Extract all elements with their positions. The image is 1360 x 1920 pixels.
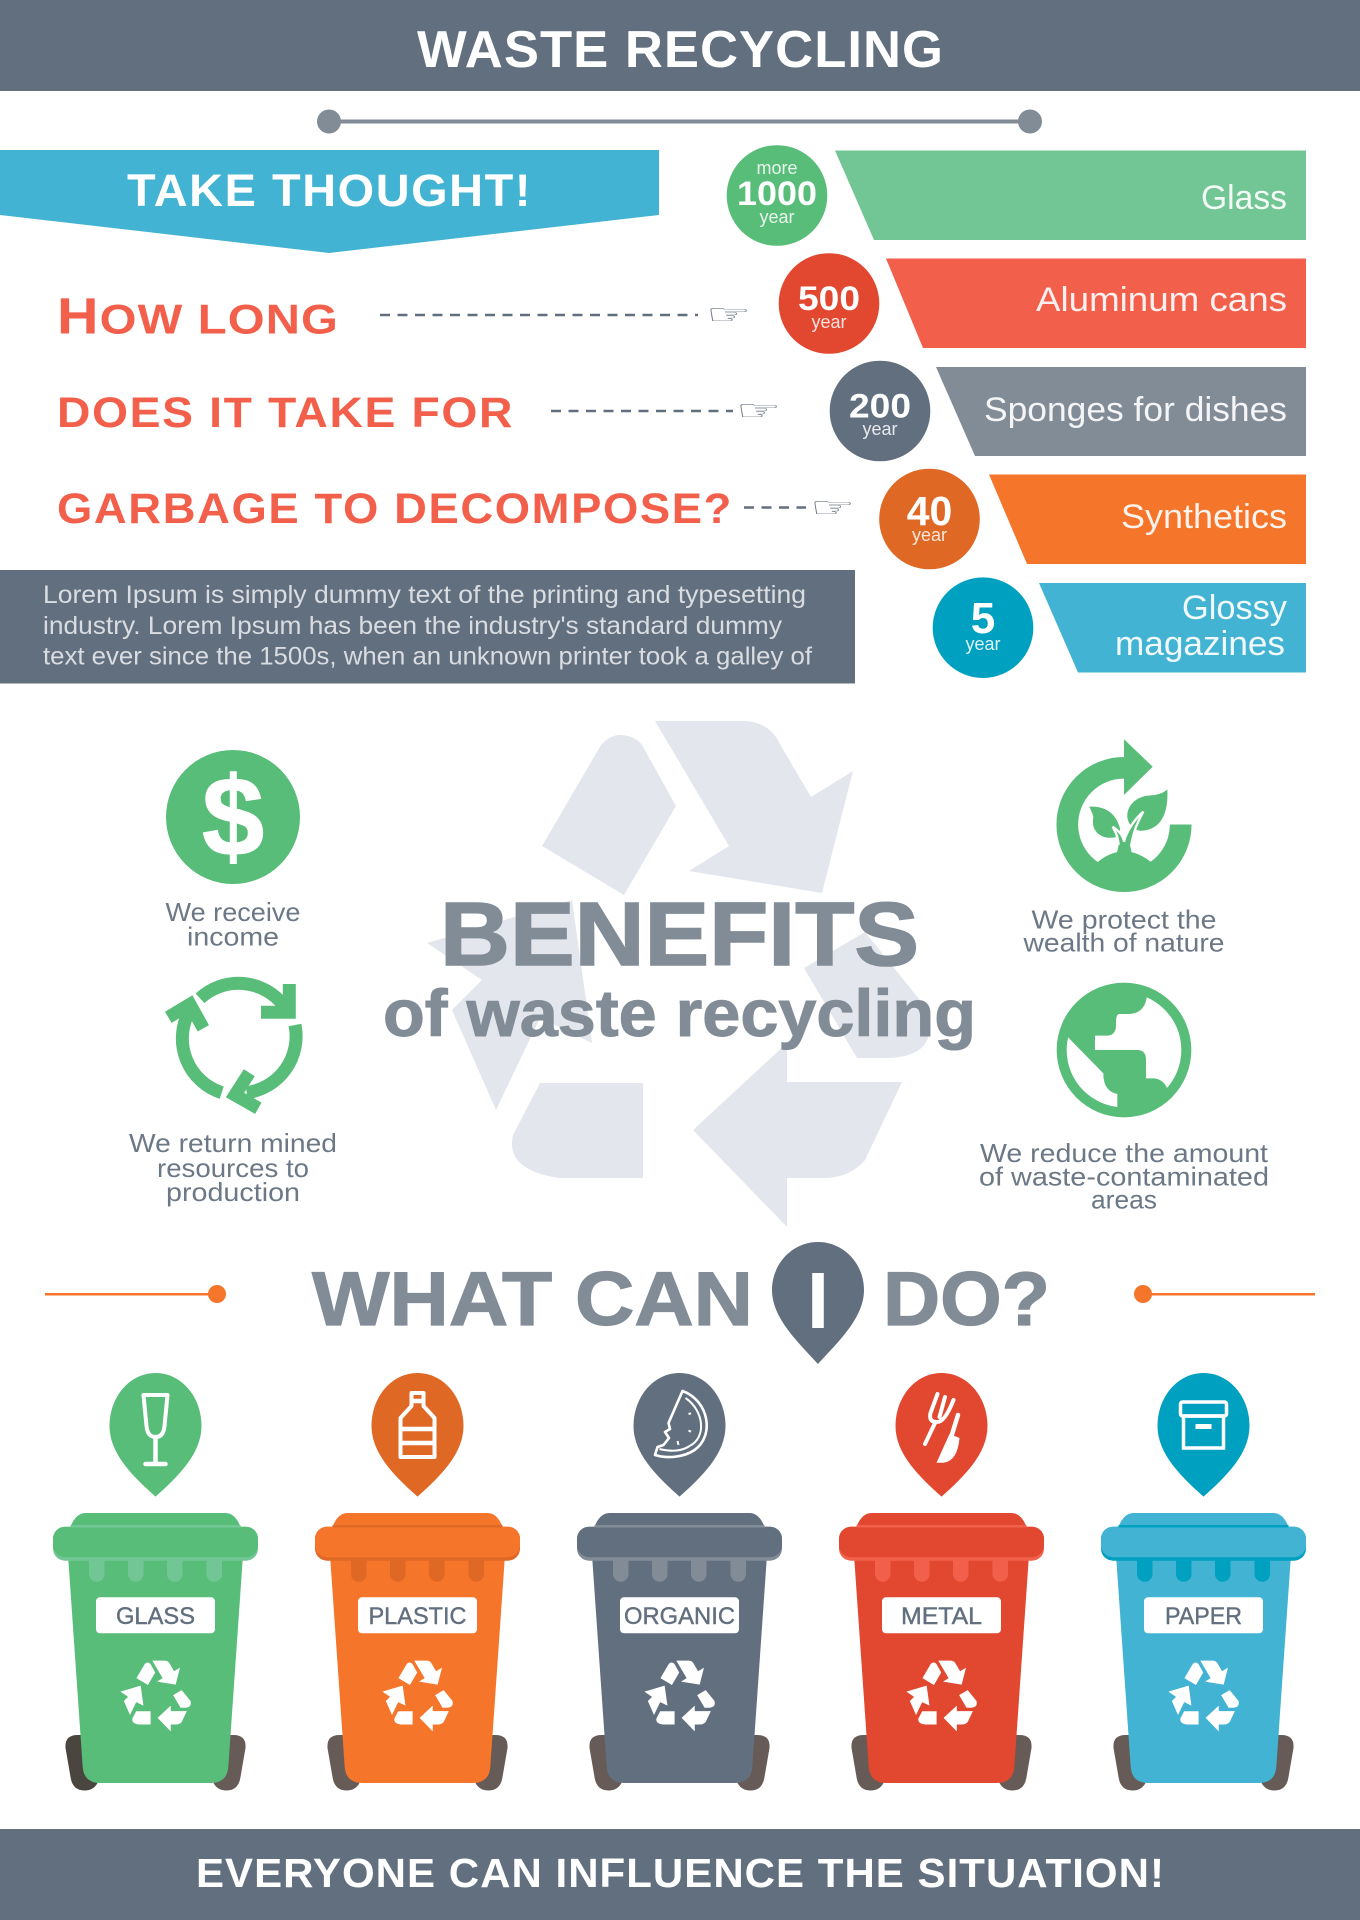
bin: plastic: [315, 1373, 520, 1790]
icon: fork and knife pin: [896, 1373, 988, 1497]
bin: metal: [839, 1373, 1044, 1790]
benefit: mined resources: We return mined: [129, 1128, 337, 1158]
dashed pointers with hands: ☞: [810, 491, 855, 524]
row: aluminum cans: 500: [798, 280, 860, 318]
banner: take thought: TAKE THOUGHT!: [127, 165, 532, 216]
heading: benefits: of waste recycling: [383, 976, 976, 1050]
icon: three circular arrows: [168, 983, 296, 1108]
benefit: wealth of nature: We protect the: [1032, 904, 1216, 934]
row: sponges for dishes: Sponges for dishes: [984, 391, 1287, 429]
row: synthetics: [879, 469, 1306, 569]
icon: watermelon pin: [634, 1373, 726, 1497]
row: glass: [727, 145, 1306, 246]
row: synthetics: year: [912, 525, 947, 545]
row: glass: Glass: [1201, 179, 1287, 217]
text block: lorem ipsum: industry. Lorem Ipsum has been the industry's standard dummy: [43, 612, 783, 640]
row: glass: year: [759, 207, 795, 227]
benefit: contaminated areas: [979, 983, 1269, 1214]
heading: what can I do: [45, 1242, 1315, 1364]
benefit: mined resources: production: [166, 1177, 300, 1207]
question heading: HOW LONG: [57, 288, 339, 344]
orange bin body: [315, 1513, 520, 1790]
icon: dollar coin: [166, 750, 300, 884]
grey bin body: [577, 1513, 782, 1790]
text block: lorem ipsum: [0, 570, 855, 684]
row: glass: more: [756, 158, 798, 178]
red bin body: METAL: [901, 1603, 982, 1630]
benefit: contaminated areas: We reduce the amount: [980, 1138, 1269, 1168]
row: glossy magazines: year: [965, 634, 1001, 654]
dashed pointers with hands: ☞: [706, 298, 751, 331]
row: sponges for dishes: year: [862, 419, 898, 439]
row: synthetics: 40: [907, 488, 952, 534]
green bin body: GLASS: [116, 1603, 195, 1630]
icon: dollar coin: $: [202, 754, 264, 879]
row: glossy magazines: Glossy: [1182, 589, 1287, 627]
question heading: GARBAGE TO DECOMPOSE?: [57, 485, 733, 533]
heading: what can I do: I: [807, 1256, 829, 1345]
benefit: contaminated areas: areas: [1091, 1184, 1157, 1214]
grey bin body: ORGANIC: [624, 1603, 735, 1630]
footer banner: [0, 1829, 1360, 1920]
footer banner: EVERYONE CAN INFLUENCE THE SITUATION!: [196, 1850, 1165, 1896]
row: sponges for dishes: 200: [849, 388, 911, 426]
heading: what can I do: DO?: [883, 1257, 1050, 1342]
bin: organic: [577, 1373, 782, 1790]
icon: globe: [1053, 983, 1197, 1117]
text block: lorem ipsum: text ever since the 1500s, when an unknown printer took a galley of: [43, 642, 812, 670]
row: glossy magazines: [933, 577, 1306, 678]
benefit: wealth of nature: [1022, 739, 1224, 958]
blue bin body: PAPER: [1165, 1603, 1242, 1630]
row: aluminum cans: Aluminum cans: [1036, 281, 1287, 319]
benefit: income: We receive: [166, 897, 300, 927]
heading: benefits: [383, 885, 976, 1050]
bin: glass: [53, 1373, 258, 1790]
question heading: [57, 288, 733, 533]
dashed pointers with hands: [380, 298, 855, 524]
watermark: recycling symbol: [427, 721, 930, 1227]
row: sponges for dishes: [830, 361, 1306, 461]
benefit: mined resources: [129, 983, 337, 1207]
heading: what can I do: WHAT CAN: [312, 1257, 753, 1342]
blue bin body: [1101, 1513, 1306, 1790]
icon: sprout in circular arrow: [1067, 739, 1181, 881]
header banner: [0, 0, 1360, 91]
benefit: mined resources: resources to: [157, 1153, 309, 1183]
connector line with end dots: [317, 110, 1042, 134]
benefit: income: income: [187, 922, 279, 952]
green bin body: [53, 1513, 258, 1790]
benefit: wealth of nature: wealth of nature: [1022, 928, 1224, 958]
question heading: DOES IT TAKE FOR: [57, 389, 514, 437]
red bin body: [839, 1513, 1044, 1790]
benefit: contaminated areas: of waste-contaminated: [979, 1162, 1269, 1192]
row: aluminum cans: year: [811, 312, 847, 332]
icon: box pin: [1158, 1373, 1250, 1497]
banner: take thought: [0, 150, 659, 253]
text block: lorem ipsum: Lorem Ipsum is simply dummy text of the printing and typesetting: [43, 581, 806, 609]
heading: benefits: BENEFITS: [440, 885, 919, 985]
bin: paper: [1101, 1373, 1306, 1790]
row: glossy magazines: 5: [971, 594, 995, 643]
decomposition time list: [727, 145, 1306, 678]
row: aluminum cans: [779, 253, 1306, 354]
orange bin body: PLASTIC: [368, 1603, 466, 1630]
benefit: income: [166, 750, 300, 952]
dashed pointers with hands: ☞: [736, 394, 781, 427]
row: glass: 1000: [737, 175, 817, 213]
title: WASTE RECYCLING: [417, 21, 944, 79]
row: synthetics: Synthetics: [1121, 498, 1287, 536]
icon: bottle pin: [372, 1373, 464, 1497]
icon: glass pin: [110, 1373, 202, 1497]
row: glossy magazines: magazines: [1115, 625, 1285, 663]
